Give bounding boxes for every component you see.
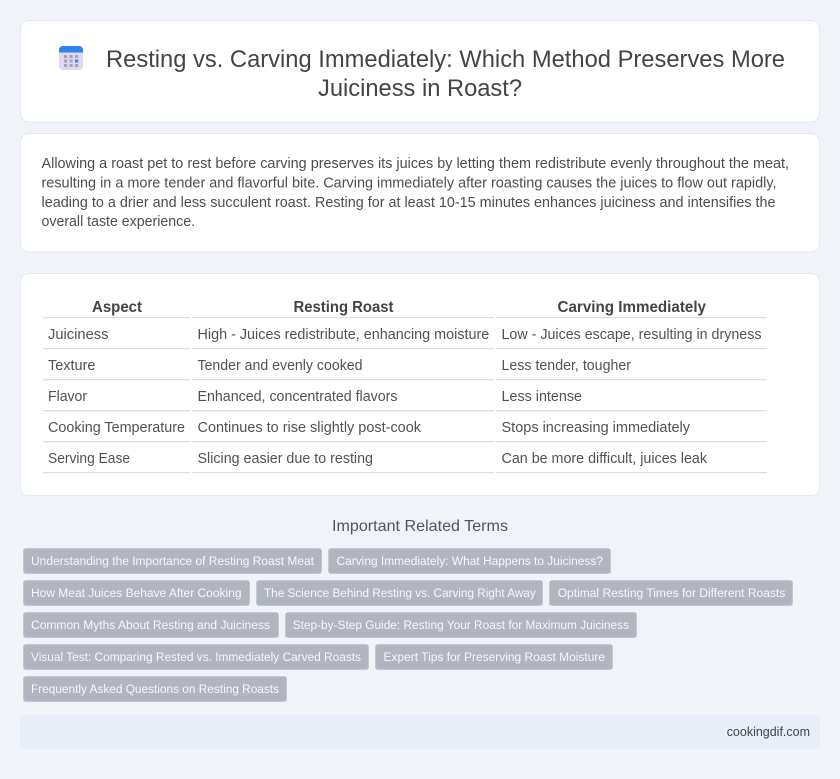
table row: cooking temperature: Cooking Temperature [48,420,185,436]
icon: calendar [59,46,83,70]
table row: serving ease [48,451,708,467]
table header [92,299,706,316]
text block: summary: resulting in a more tender and flavorful bite. Carving immediately after roasting causes the juices to flow out rapidly, [42,176,776,192]
text block: summary [42,156,789,230]
table row: texture: Tender and evenly cooked [198,358,362,374]
table row: juiciness: High - Juices redistribute, enhancing moisture [198,327,489,343]
tag: Common Myths About Resting and Juiciness [31,618,270,632]
table row: cooking temperature: Stops increasing immediately [502,420,691,436]
tag: Expert Tips for Preserving Roast Moisture [384,650,605,664]
title: Resting vs. Carving Immediately: Which Method Preserves More [106,46,785,73]
table row: texture: Texture [48,358,96,374]
tag: How Meat Juices Behave After Cooking [31,586,242,600]
title: Juiciness in Roast? [318,75,522,102]
panel: title card [20,20,820,122]
tag: Understanding the Importance of Resting Roast Meat [31,554,315,568]
tag: Frequently Asked Questions on Resting Roasts [31,682,279,696]
footer [20,715,820,749]
tag [286,612,636,638]
tag [24,612,278,638]
tag: Optimal Resting Times for Different Roasts [558,586,785,600]
text block: summary: overall taste experience. [42,214,195,230]
tag [256,580,542,606]
tag: Visual Test: Comparing Rested vs. Immediately Carved Roasts [31,650,361,664]
table row: juiciness: Low - Juices escape, resulting in dryness [502,327,762,343]
table row: texture: Less tender, tougher [502,358,631,374]
tag [376,644,612,670]
table row: flavor: Enhanced, concentrated flavors [198,389,398,405]
panel: comparison table [20,274,820,496]
panel: related term tags [24,548,792,702]
table header: Aspect [92,299,143,316]
text block: summary: leading to a drier and less succulent roast. Resting for at least 10-15 minutes enhances juiciness and intensifies the [42,195,776,211]
table row: serving ease: Slicing easier due to resting [198,451,373,467]
table row: cooking temperature [48,420,691,436]
title [106,46,785,102]
tag [24,676,286,702]
table row: serving ease: Serving Ease [48,451,130,467]
heading: related terms: Important Related Terms [332,518,508,535]
text block: summary: Allowing a roast pet to rest before carving preserves its juices by letting them redistribute evenly throughout the meat, [42,156,789,172]
table header: Resting Roast [294,299,394,316]
table row: texture [48,358,631,374]
footer: cookingdif.com [727,725,810,739]
tag: The Science Behind Resting vs. Carving Right Away [264,586,537,600]
table row: serving ease: Can be more difficult, juices leak [502,451,708,467]
table row: flavor: Less intense [502,389,582,405]
tag [24,580,250,606]
tag [24,548,322,574]
table row: flavor: Flavor [48,389,87,405]
tag [550,580,792,606]
table row: cooking temperature: Continues to rise slightly post-cook [198,420,422,436]
tag: Step-by-Step Guide: Resting Your Roast for Maximum Juiciness [293,618,629,632]
table row: juiciness: Juiciness [48,327,108,343]
panel: summary paragraph [20,134,820,252]
tag [328,548,610,574]
tag [24,644,368,670]
tag: Carving Immediately: What Happens to Juiciness? [336,554,603,568]
table row: juiciness [48,327,762,343]
table row: flavor [48,389,582,405]
table header: Carving Immediately [558,299,706,316]
